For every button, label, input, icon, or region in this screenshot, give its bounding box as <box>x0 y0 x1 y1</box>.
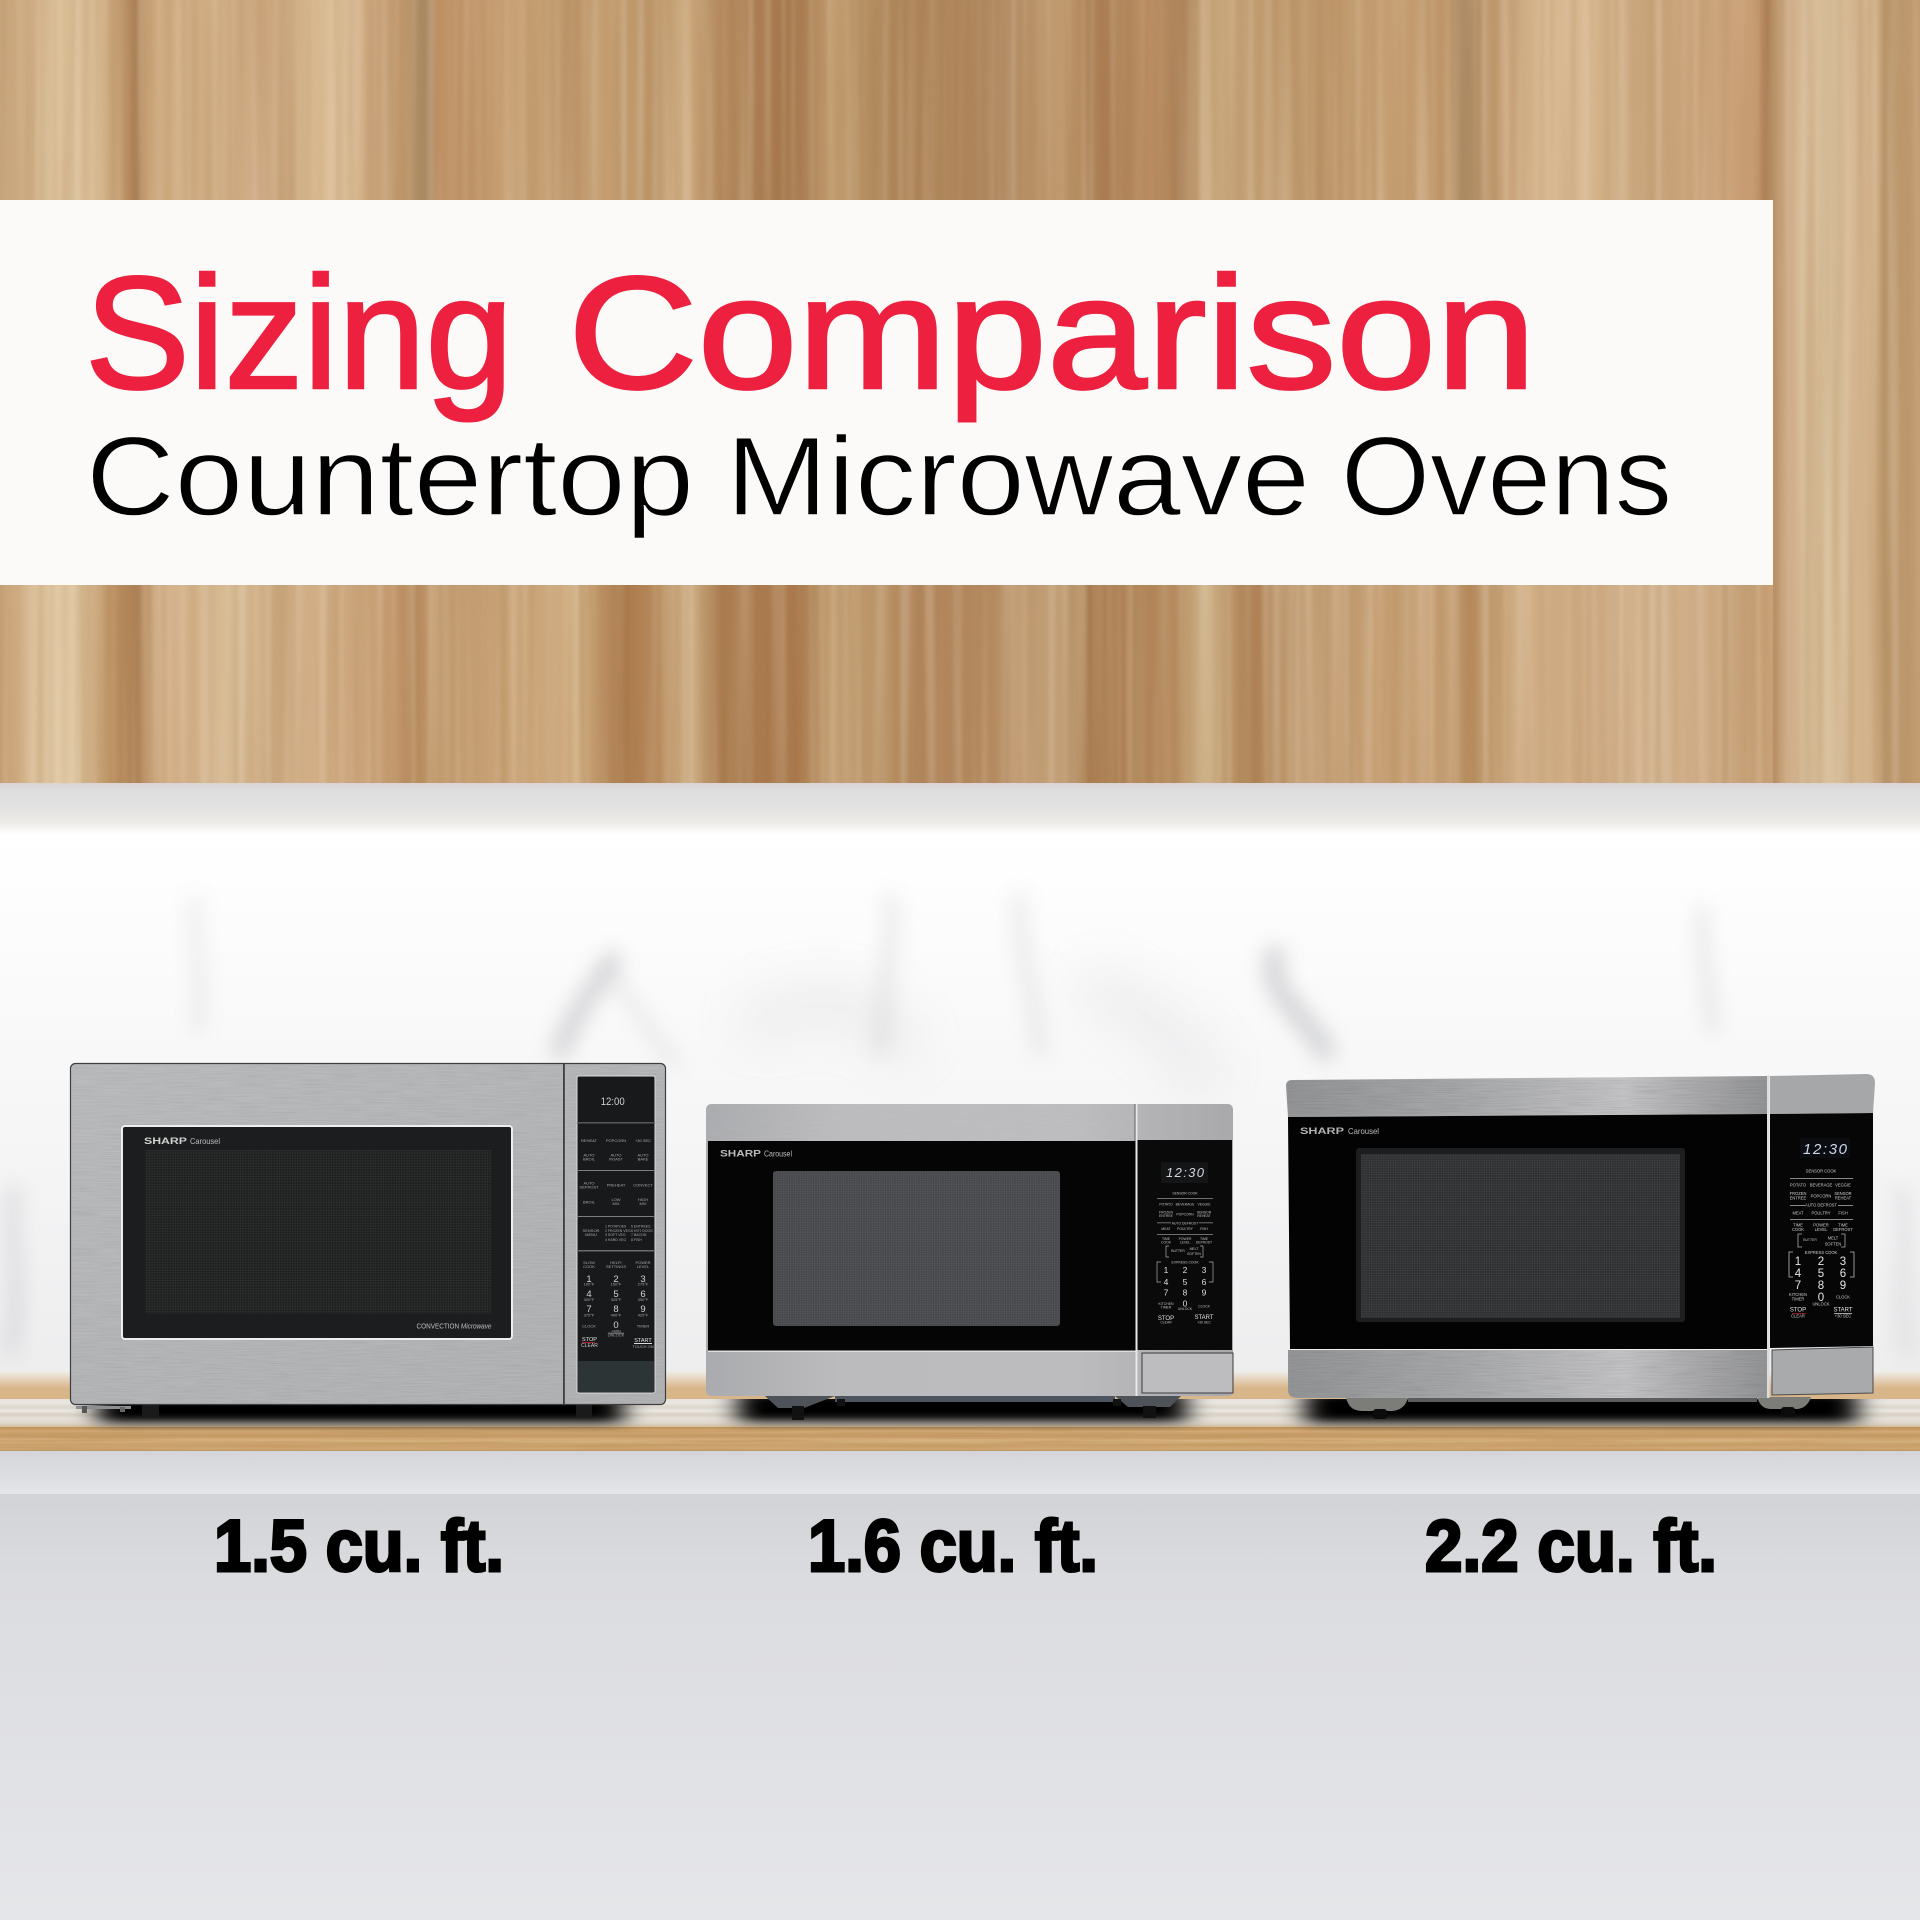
control panel <box>577 1076 655 1393</box>
control panel <box>1138 1140 1232 1350</box>
control panel: 9 <box>640 1304 646 1315</box>
control panel: 9 <box>1202 1288 1207 1298</box>
control panel: DEFROST <box>579 1184 599 1190</box>
logo: Carousel <box>764 1150 792 1158</box>
subheading: Countertop Microwave Ovens: Countertop <box>86 414 694 539</box>
background: marble backsplash <box>0 783 1920 1380</box>
control panel: VEGGIE <box>1835 1182 1851 1188</box>
control panel: MENU <box>585 1232 597 1237</box>
control panel: BUTTER <box>1803 1238 1817 1242</box>
control panel: STOP <box>582 1337 597 1343</box>
control panel: POPCORN <box>606 1138 626 1143</box>
control panel: LOW <box>611 1197 621 1202</box>
control panel: 100°F <box>584 1282 595 1286</box>
control panel: 275°F <box>638 1282 649 1286</box>
front body <box>706 1104 1233 1396</box>
control panel: POTATO <box>1790 1182 1806 1188</box>
subheading: Countertop Microwave Ovens <box>86 414 1672 539</box>
control panel: BROIL <box>583 1156 596 1162</box>
control panel: LEVEL <box>1815 1227 1828 1232</box>
control panel: TIMER <box>637 1324 649 1328</box>
control panel: PREHEAT <box>607 1182 626 1188</box>
control panel: 5 <box>1818 1268 1824 1280</box>
control panel: 2 <box>1818 1256 1824 1268</box>
control panel: ENTREE <box>1790 1196 1807 1200</box>
logo: SHARP <box>720 1148 761 1158</box>
control panel: SOFTEN <box>1825 1242 1841 1246</box>
control panel: LEVEL <box>637 1264 650 1269</box>
control panel: 3 <box>1202 1265 1207 1275</box>
control panel: 425°F <box>638 1312 649 1318</box>
control panel: AUTO <box>583 1152 595 1158</box>
control panel: 7 <box>1795 1280 1801 1292</box>
feet <box>1346 1397 1811 1419</box>
control panel: 7 <box>586 1304 592 1315</box>
countertop: wood edge and gloss <box>0 1370 1920 1451</box>
control panel: TIMER <box>1792 1296 1804 1302</box>
control panel: LEVEL <box>1180 1240 1190 1244</box>
control panel: 12:30 <box>1803 1141 1848 1158</box>
control panel: 3 <box>640 1274 646 1285</box>
logo <box>1300 1126 1379 1137</box>
control panel: 8 <box>1818 1280 1824 1292</box>
control panel: SENSOR <box>583 1228 600 1233</box>
divider <box>1767 1075 1770 1398</box>
window mesh <box>773 1171 1060 1326</box>
control panel: POWER <box>635 1260 651 1265</box>
control panel: KITCHEN <box>1789 1292 1807 1297</box>
control panel: 4 <box>586 1289 592 1300</box>
door handle <box>1772 1347 1873 1395</box>
control panel: COOK <box>1161 1240 1172 1244</box>
control panel: MIX <box>639 1201 647 1206</box>
control panel: 4 <box>1795 1268 1802 1280</box>
control panel: +30 SEC <box>1835 1314 1851 1318</box>
feet <box>76 1404 592 1417</box>
brushed texture <box>72 1065 664 1403</box>
control panel: POPCORN <box>1811 1194 1831 1198</box>
control panel: 0 <box>613 1320 619 1331</box>
logo: SHARP <box>1300 1126 1345 1137</box>
control panel: FROZEN <box>1159 1210 1174 1214</box>
control panel: POTATO <box>1159 1202 1173 1206</box>
black door <box>708 1141 1136 1351</box>
control panel: AUTO DEFROST <box>1805 1202 1837 1208</box>
control panel: 3 <box>1840 1256 1846 1268</box>
control panel: 6 <box>1202 1277 1207 1287</box>
control panel: FISH <box>1200 1227 1208 1231</box>
logo <box>720 1148 792 1158</box>
control panel: MELT <box>1190 1247 1198 1251</box>
control panel: COOK <box>583 1264 595 1269</box>
control panel <box>1770 1113 1873 1348</box>
top band <box>1286 1076 1768 1117</box>
control panel: STOP <box>1790 1308 1806 1314</box>
control panel: UNLOCK <box>608 1332 625 1338</box>
control panel: CONVECT <box>633 1182 653 1188</box>
control panel: FROZEN <box>1790 1191 1806 1196</box>
control panel: 375°F <box>584 1312 595 1318</box>
control panel: 2 <box>613 1274 619 1285</box>
control panel: REHEAT <box>1835 1196 1852 1200</box>
bottom band <box>1288 1350 1768 1398</box>
control panel: POPCORN <box>1176 1212 1194 1216</box>
control panel: 1 <box>1164 1265 1169 1275</box>
control panel: BUTTER <box>1171 1249 1185 1253</box>
counter front panel <box>0 1451 1920 1494</box>
control panel: SENSOR COOK <box>1172 1192 1198 1196</box>
control panel: AUTO <box>583 1180 595 1186</box>
control panel: 1 <box>1795 1256 1801 1268</box>
control panel: MEAT <box>1161 1227 1171 1231</box>
heading: Sizing Comparison: Comparison <box>568 243 1536 422</box>
control panel: START <box>1194 1315 1214 1321</box>
control panel: 9 <box>1840 1280 1846 1292</box>
control panel: POULTRY <box>1812 1210 1831 1216</box>
control panel: AUTO <box>610 1152 622 1158</box>
logo: SHARP <box>144 1136 187 1146</box>
control panel: 7 <box>1164 1288 1169 1298</box>
control panel: SENSOR <box>1197 1210 1212 1214</box>
control panel: BEVERAGE <box>1810 1182 1833 1188</box>
control panel: STOP <box>1158 1316 1174 1322</box>
logo: Carousel <box>190 1137 220 1146</box>
logo: Carousel <box>1348 1126 1379 1136</box>
control panel: TIME <box>1162 1237 1171 1241</box>
door handle <box>1142 1353 1233 1393</box>
control panel: SENSOR <box>1834 1191 1852 1196</box>
heading: Sizing Comparison: Sizing <box>85 243 513 422</box>
control panel: 12:30 <box>1166 1165 1205 1180</box>
subheading: Countertop Microwave Ovens: Microwave <box>726 414 1310 539</box>
control panel: 8 <box>613 1304 619 1315</box>
control panel: MIX <box>612 1201 620 1206</box>
control panel: 2 FROZEN VEG <box>605 1229 631 1233</box>
control panel: +30 SEC <box>635 1138 651 1143</box>
control panel: EXPRESS COOK <box>1805 1250 1838 1255</box>
top band texture <box>706 1104 1134 1141</box>
control panel: 325°F <box>611 1297 622 1302</box>
control panel: CLOCK <box>1836 1294 1850 1300</box>
control panel: BAKE <box>638 1156 649 1162</box>
logo <box>144 1136 220 1146</box>
control panel: TIME <box>1838 1222 1848 1228</box>
control panel: CLOCK <box>1198 1304 1211 1308</box>
control panel: MEAT <box>1792 1210 1804 1216</box>
divider <box>1136 1104 1138 1396</box>
control panel: POWER <box>1813 1222 1829 1228</box>
control panel: HELP/ <box>610 1260 623 1265</box>
window mesh <box>1356 1148 1685 1322</box>
control panel: 400°F <box>611 1312 622 1318</box>
control panel: COOK <box>1792 1227 1804 1232</box>
control panel: VEGGIE <box>1197 1202 1211 1206</box>
control panel: KITCHEN <box>1159 1302 1174 1306</box>
control panel: BROIL <box>583 1200 596 1204</box>
control panel: 1 <box>586 1274 592 1285</box>
control panel: EXPRESS COOK <box>1172 1260 1199 1264</box>
control panel: DEFROST <box>1833 1227 1853 1232</box>
control panel: 6 <box>1840 1268 1846 1280</box>
label: 1.5 cu. ft.: 1.5 cu. ft. <box>214 1506 504 1587</box>
control panel: 5 <box>613 1289 619 1300</box>
control panel: CLEAR <box>581 1343 598 1349</box>
black door <box>1288 1114 1768 1349</box>
control panel: TIME <box>1793 1222 1803 1228</box>
control panel: +30 SEC <box>1197 1320 1211 1324</box>
stainless body <box>70 1064 666 1404</box>
control panel: SLOW <box>583 1260 595 1265</box>
control panel: 7 BACON <box>631 1233 647 1237</box>
control panel: MELT <box>1828 1236 1839 1240</box>
control panel: UNLOCK <box>1812 1302 1830 1306</box>
control panel: ROAST <box>609 1156 623 1162</box>
brushed texture <box>1288 1080 1766 1397</box>
microwave: 1.5 cu. ft. convection <box>70 1063 666 1417</box>
title banner <box>0 200 1773 585</box>
control panel: POULTRY <box>1177 1227 1194 1231</box>
control panel: 5 ENTREES <box>631 1224 651 1228</box>
control panel: 1 POTATOES <box>605 1224 627 1228</box>
control panel: 300°F <box>584 1297 595 1302</box>
control panel: CLOCK <box>582 1324 596 1328</box>
microwave: 1.6 cu. ft. <box>706 1104 1233 1420</box>
control panel: START <box>1833 1308 1853 1314</box>
label: 2.2 cu. ft.: 2.2 cu. ft. <box>1425 1506 1717 1587</box>
control panel: 8 <box>1183 1288 1188 1298</box>
control panel: 4 <box>1164 1277 1169 1287</box>
control panel: START <box>634 1338 652 1344</box>
control panel: 0 <box>1183 1298 1188 1308</box>
control panel: AUTO DEFROST <box>1172 1222 1198 1226</box>
control panel: 6 HOT DOGS <box>631 1229 653 1233</box>
control panel: 3 SOFT VEG <box>605 1233 626 1237</box>
control panel: ENTREE <box>1159 1214 1174 1218</box>
door label: CONVECTION Microwave <box>416 1322 492 1330</box>
control panel: TIMER <box>1161 1306 1172 1310</box>
shadows under microwaves <box>98 1392 1857 1423</box>
control panel: 5 <box>1183 1277 1188 1287</box>
control panel: 2 <box>1183 1265 1188 1275</box>
microwave: 2.2 cu. ft. <box>1286 1074 1875 1419</box>
control panel: HIGH <box>638 1197 648 1202</box>
control panel: POWER <box>1179 1237 1192 1241</box>
control panel: DEFROST <box>1196 1240 1212 1244</box>
control panel: 12:00 <box>601 1096 625 1108</box>
control panel: CLEAR <box>1791 1314 1805 1318</box>
control panel: BEVERAGE <box>1176 1202 1195 1206</box>
control panel: TOUCH ON <box>632 1344 654 1349</box>
control panel: TIME <box>1200 1237 1209 1241</box>
background: wood cabinets upper <box>0 0 1920 785</box>
control panel: 150°F <box>611 1282 622 1286</box>
control panel: +MIN <box>611 1328 621 1334</box>
heading: Sizing Comparison <box>85 243 1536 422</box>
control panel: 0 <box>1818 1292 1824 1304</box>
control panel: SOFTEN <box>1187 1252 1201 1256</box>
control panel: REHEAT <box>1197 1214 1211 1218</box>
floor panel <box>0 1494 1920 1920</box>
control panel: 350°F <box>638 1297 649 1302</box>
control panel: 8 FISH <box>631 1238 642 1242</box>
control panel: 6 <box>640 1289 646 1300</box>
divider <box>563 1063 565 1405</box>
label: 1.6 cu. ft.: 1.6 cu. ft. <box>808 1506 1098 1587</box>
side band <box>1770 1074 1875 1114</box>
control panel: CLEAR <box>1160 1320 1172 1324</box>
control panel: AUTO <box>637 1152 649 1158</box>
control panel: SENSOR COOK <box>1806 1168 1837 1174</box>
control panel: 4 HARD VEG <box>605 1238 626 1242</box>
base and feet <box>765 1396 1181 1420</box>
control panel: FISH <box>1838 1210 1848 1216</box>
door window <box>122 1126 512 1339</box>
control panel: REHEAT <box>581 1138 598 1143</box>
control panel: UNLOCK <box>1178 1307 1193 1311</box>
subheading: Countertop Microwave Ovens: Ovens <box>1341 414 1672 539</box>
control panel: SETTINGS <box>606 1264 626 1269</box>
